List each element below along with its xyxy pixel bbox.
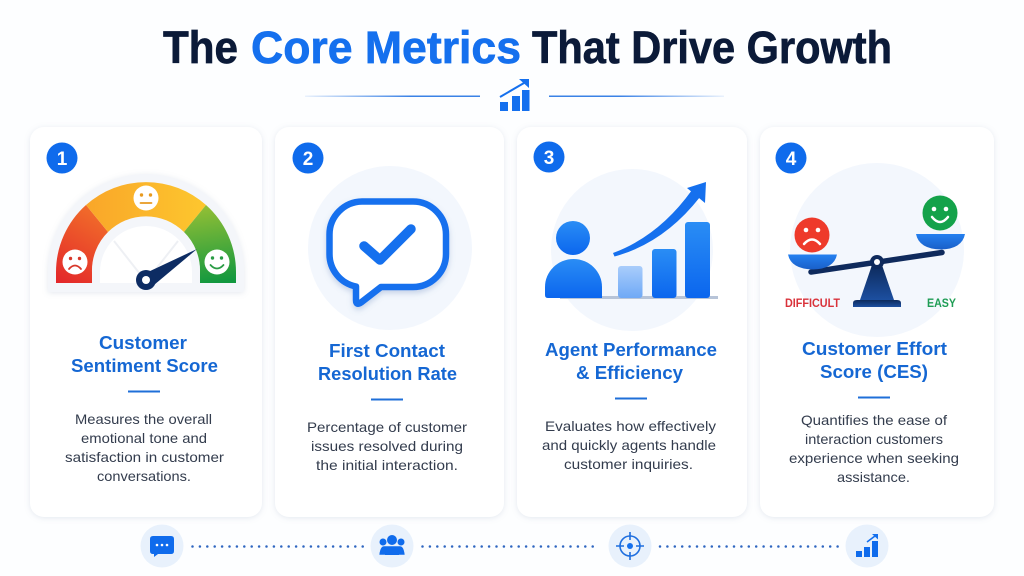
description: Evaluates how effectively (545, 418, 716, 434)
happy face (204, 250, 230, 274)
heading: Agent Performance (545, 339, 717, 360)
arrow (613, 182, 706, 256)
panel: customer sentiment score: Sentiment Score (71, 355, 218, 376)
icon: chat (140, 524, 184, 568)
heading: Customer (99, 332, 187, 353)
panel: agent performance and efficiency: & Efficiency (576, 362, 684, 383)
description: Measures the overall (75, 411, 212, 427)
title: The (163, 22, 238, 73)
panel: customer effort score (760, 127, 994, 517)
badge 1: 1 (57, 149, 68, 170)
description: satisfaction in customer (65, 449, 224, 465)
description: the initial interaction. (316, 457, 458, 473)
icon: growth chart (846, 524, 888, 568)
description (542, 418, 716, 472)
label: difficult: DIFFICULT (785, 296, 841, 310)
icon: target (608, 524, 652, 568)
title: Core Metrics (251, 22, 521, 73)
description (789, 412, 959, 485)
panel: first contact resolution rate (275, 127, 504, 517)
dotted connectors (192, 545, 838, 548)
badge 4: 4 (786, 149, 797, 170)
panel: customer effort score: Score (CES) (820, 361, 928, 382)
description: customer inquiries. (564, 456, 693, 472)
sad face (62, 250, 88, 274)
description (307, 419, 467, 473)
description: emotional tone and (81, 430, 207, 446)
description: experience when seeking (789, 450, 959, 466)
badge 1 (46, 142, 78, 174)
description (65, 411, 224, 484)
heading: First Contact (329, 340, 445, 361)
sad face (794, 218, 830, 252)
panel: first contact resolution rate: Resolution Rate (318, 363, 457, 384)
heading: Customer Effort (802, 338, 947, 359)
description: and quickly agents handle (542, 437, 716, 453)
icon: balance scale (785, 163, 965, 337)
icon: team (370, 524, 414, 568)
happy face (922, 196, 958, 230)
icon: sentiment gauge (48, 174, 244, 292)
icon: chat bubble with check (308, 166, 472, 330)
label: easy: EASY (927, 296, 956, 310)
title (163, 22, 892, 73)
badge 2 (292, 142, 324, 174)
description: Quantifies the ease of (801, 412, 947, 428)
description: interaction customers (805, 431, 943, 447)
badge 4 (776, 142, 806, 174)
needle (136, 249, 197, 290)
title: That Drive Growth (532, 22, 892, 73)
bottom icon row (140, 524, 888, 568)
description: conversations. (97, 468, 191, 484)
description: Percentage of customer (307, 419, 467, 435)
description: assistance. (837, 469, 910, 485)
badge 3: 3 (544, 148, 554, 169)
icon: agent with rising bars (545, 169, 718, 331)
panel: agent performance and efficiency (517, 127, 747, 517)
badge 2: 2 (303, 149, 313, 170)
title divider with growth icon (305, 79, 724, 111)
badge 3 (534, 142, 564, 172)
description: issues resolved during (311, 438, 463, 454)
panel: customer sentiment score (30, 127, 262, 517)
neutral face (134, 186, 158, 210)
